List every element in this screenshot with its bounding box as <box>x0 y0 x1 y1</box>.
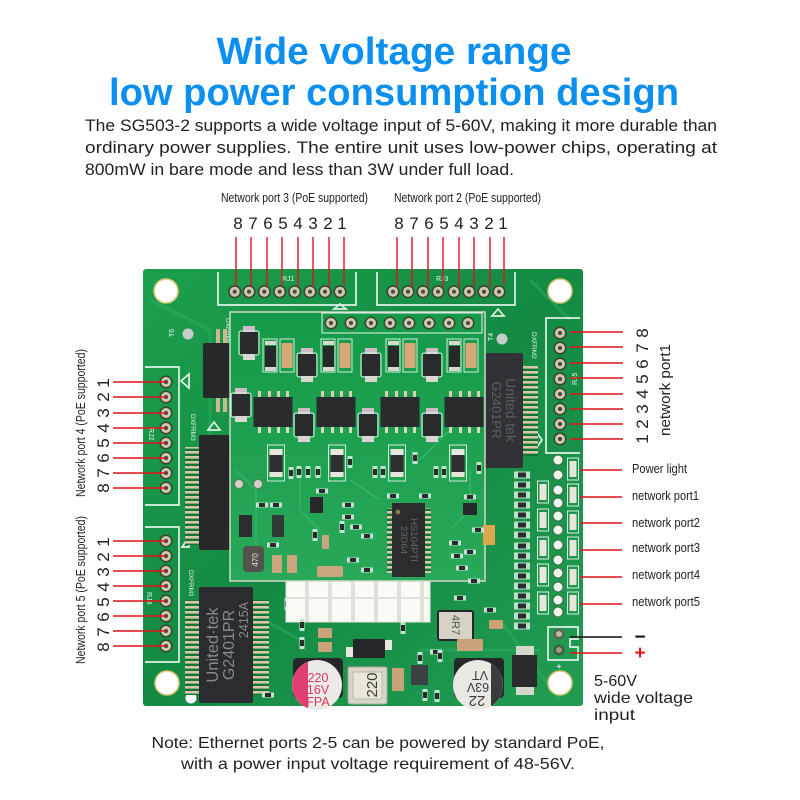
intro paragraph: ordinary power supplies. The entire unit uses low-power chips, operating at <box>85 139 717 157</box>
power components: 4R7 <box>449 615 461 635</box>
voltage input label: input <box>594 707 636 724</box>
silk labels: RJ4 <box>145 592 152 605</box>
header pins: port 3 <box>228 285 347 298</box>
daughter board pin header <box>322 313 482 333</box>
controller chip U6 <box>387 503 431 577</box>
indicator labels: network port4 <box>632 567 700 582</box>
small daughter board parts <box>234 452 495 584</box>
port 1 labels <box>633 328 674 444</box>
silk labels: DXFRM3 <box>189 414 196 441</box>
silk labels <box>145 276 579 605</box>
Ethernet transformer: United·tek <box>204 607 222 683</box>
circuit board <box>143 269 583 710</box>
header pins: port 2 <box>386 285 506 298</box>
resistor column <box>284 472 530 630</box>
indicator labels: network port1 <box>632 488 699 503</box>
title: Wide voltage range <box>216 31 572 73</box>
polarity symbols: − <box>634 627 646 648</box>
electrolytic capacitor 220uF: 220 <box>308 671 328 685</box>
silk labels: DXFRM1 <box>187 570 194 597</box>
PoE note: Note: Ethernet ports 2-5 can be powered by standard PoE, <box>152 735 604 752</box>
controller chip U6: HS104PTI <box>408 518 419 562</box>
voltage input label: 5-60V <box>594 673 637 690</box>
LED indicator column <box>538 455 578 617</box>
electrolytic capacitor 22uF: 63V <box>466 680 489 694</box>
power components <box>262 596 537 704</box>
silk labels: DXFRM2 <box>530 332 537 359</box>
intro paragraph: 800mW in bare mode and less than 3W under full load. <box>85 161 514 179</box>
title <box>109 31 679 114</box>
header pins: port 4 <box>159 375 173 495</box>
electrolytic capacitor 220uF: 16V <box>307 683 330 697</box>
chips on base board <box>185 329 538 550</box>
silkscreen connector outlines <box>145 272 580 662</box>
port 3 labels <box>221 190 368 233</box>
voltage input label <box>593 673 693 724</box>
electrolytic capacitor 22uF <box>453 658 504 710</box>
silk labels: DXFRM4 <box>224 318 231 345</box>
indicator labels: Power light <box>632 461 687 476</box>
port 3 labels: Network port 3 (PoE supported) <box>221 190 368 205</box>
controller chip U6: 23D64 <box>398 526 409 554</box>
mounting holes <box>154 279 572 704</box>
power input terminal <box>554 628 564 671</box>
port 4 labels <box>73 349 113 497</box>
Ethernet transformer: G2401PR <box>221 610 238 680</box>
port 1 labels: 12345678 <box>633 328 652 444</box>
indicator labels <box>632 461 700 609</box>
port 5 labels: Network port 5 (PoE supported) <box>73 516 88 664</box>
indicator labels: network port5 <box>632 594 700 609</box>
silk labels: T6 <box>169 329 176 337</box>
silk labels: RJ5 <box>572 372 579 385</box>
silk labels: RJ3 <box>436 276 449 283</box>
silk labels: RJ2 <box>147 428 154 441</box>
power components: 220 <box>364 672 381 698</box>
intro paragraph: The SG503-2 supports a wide voltage input of 5-60V, making it more durable than <box>85 117 717 135</box>
small daughter board parts: 470 <box>251 553 260 567</box>
indicator labels: network port2 <box>632 515 700 530</box>
port 2 labels <box>394 190 541 233</box>
title: low power consumption design <box>109 72 679 114</box>
PoE note <box>152 735 604 773</box>
chips on base board: G2401PR <box>489 381 504 439</box>
port 3 labels: 87654321 <box>233 214 347 233</box>
Ethernet transformer <box>185 587 269 703</box>
PoE daughter board <box>230 312 495 584</box>
polarity symbols: + <box>634 643 646 664</box>
PoE note: with a power input voltage requirement of 48-56V. <box>180 756 575 773</box>
port 5 labels: 87654321 <box>94 537 113 652</box>
electrolytic capacitor 22uF: 22 <box>469 692 485 709</box>
indicator labels: network port3 <box>632 540 700 555</box>
polarity symbols <box>634 627 646 664</box>
header pins: port 5 <box>159 534 173 653</box>
power input terminal: + <box>557 662 562 671</box>
header pins: port 1 <box>553 326 567 446</box>
PoE rectifier row <box>231 326 484 481</box>
Ethernet transformer: 2415A <box>237 601 251 638</box>
voltage input label: wide voltage <box>593 690 693 707</box>
negative terminal leader line <box>570 636 622 638</box>
port 5 labels <box>73 516 113 664</box>
port 1 labels: network port1 <box>657 344 674 436</box>
electrolytic capacitor 22uF: VT <box>472 668 488 682</box>
electrolytic capacitor 220uF: FPA <box>306 695 330 709</box>
port 2 labels: 87654321 <box>394 214 508 233</box>
white connector <box>286 581 430 622</box>
port 2 labels: Network port 2 (PoE supported) <box>394 190 541 205</box>
electrolytic capacitor 220uF <box>292 658 343 710</box>
silk labels: T4 <box>488 333 495 341</box>
pin leader lines <box>113 237 623 653</box>
chips on base board: United·tek <box>503 378 519 443</box>
port 4 labels: Network port 4 (PoE supported) <box>73 349 88 497</box>
intro paragraph <box>85 117 717 179</box>
silk labels: RJ1 <box>282 276 295 283</box>
port 4 labels: 87654321 <box>94 378 113 493</box>
